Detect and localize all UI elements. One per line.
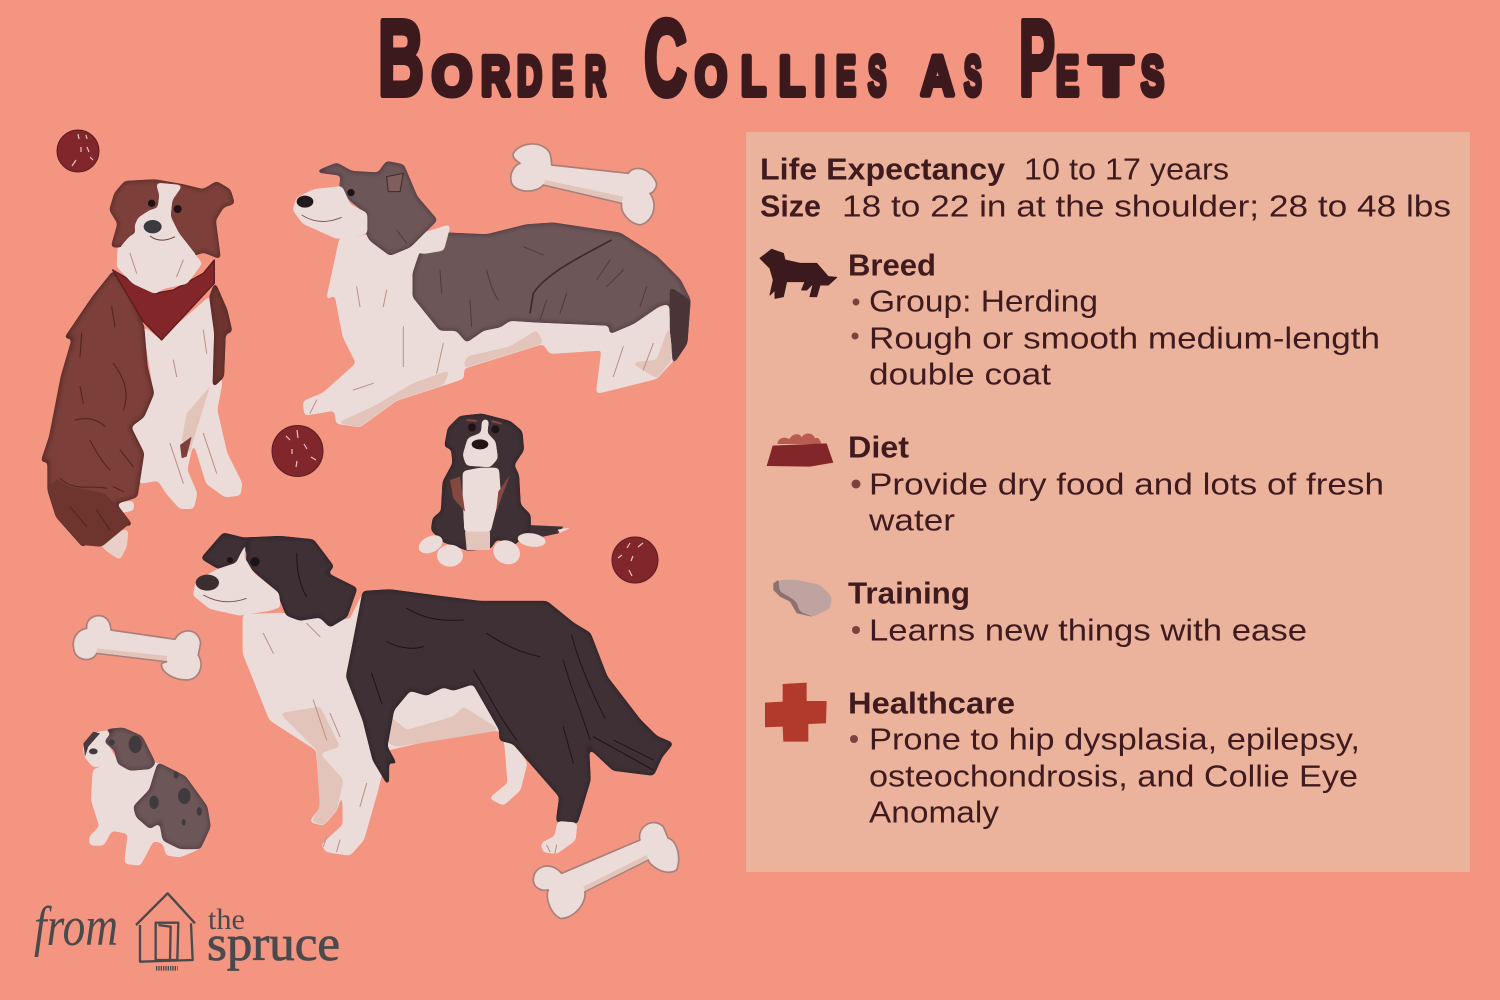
bone shading (544, 180, 623, 202)
paws (416, 531, 546, 569)
tail tip (92, 530, 128, 560)
bone shape (73, 616, 201, 680)
face details (196, 557, 260, 602)
right coat strip (210, 283, 232, 387)
grey body (134, 763, 210, 848)
title: A (921, 44, 954, 107)
section: diet (848, 430, 1384, 538)
title: I (815, 44, 825, 107)
bone: top right (511, 144, 657, 225)
bullet dot (852, 480, 860, 488)
panel background (746, 132, 1470, 872)
hind paw (113, 502, 133, 513)
icon: red cross (765, 683, 827, 742)
title: T (1090, 44, 1132, 107)
title: S (868, 44, 894, 107)
black head (202, 533, 357, 627)
bullet text continued: double coat (869, 358, 1052, 392)
title: R (481, 44, 510, 107)
title: L (779, 44, 805, 107)
food (777, 434, 821, 444)
heading: Diet (848, 430, 909, 464)
white coat base (303, 230, 673, 427)
muzzle (193, 538, 280, 615)
blaze and muzzle (120, 183, 197, 260)
bullet text: Provide dry food and lots of fresh (869, 468, 1384, 502)
heading: Breed (848, 248, 936, 282)
from script: from (34, 896, 118, 958)
grey head (102, 728, 155, 770)
bone: left (73, 616, 201, 680)
bullet text continued: water (868, 504, 955, 538)
white chest (463, 468, 500, 532)
ball: right (612, 537, 658, 583)
title: R (585, 44, 614, 107)
title: O (432, 44, 472, 107)
chest ruff (117, 237, 202, 293)
size: Size (760, 190, 821, 224)
fur strokes (60, 307, 133, 530)
icon: food bowl (767, 434, 833, 467)
spots and face (89, 736, 202, 826)
white face (83, 730, 118, 767)
heading: Healthcare (848, 686, 1015, 720)
bone shading (97, 648, 167, 661)
dog: grey lying collie (293, 162, 690, 427)
rear paw (542, 822, 577, 853)
bullet text: Prone to hip dysplasia, epilepsy, (869, 722, 1360, 756)
dog: black and white puppy (416, 414, 568, 569)
dog: large black and white standing collie (193, 533, 673, 855)
logo: from the spruce (34, 893, 340, 971)
title: D (517, 44, 542, 107)
bullet text continued: Anomaly (869, 796, 1000, 830)
grey head (317, 162, 437, 255)
tail shading (48, 478, 130, 547)
white coat (90, 760, 200, 865)
title: E (1056, 44, 1079, 107)
bullet text: Rough or smooth medium-length (869, 322, 1380, 356)
shaded belly and leg (337, 323, 672, 427)
thigh line (530, 240, 612, 313)
title: S (1141, 44, 1164, 107)
face details (297, 173, 403, 221)
bone: bottom right (533, 823, 679, 918)
life expectancy: 10 to 17 years (1024, 152, 1229, 186)
bowl (767, 443, 833, 467)
dark ear left (83, 732, 100, 757)
title: C (644, 0, 687, 118)
ball: top left (57, 130, 99, 172)
title: P (1019, 0, 1055, 118)
bullet text: Learns new things with ease (869, 614, 1307, 648)
title: L (741, 44, 766, 107)
bandana (113, 260, 214, 340)
shape (778, 580, 832, 617)
face details (467, 420, 502, 449)
dog: small merle puppy (83, 728, 210, 865)
heading: Training (848, 576, 970, 610)
ball: centre (272, 426, 323, 476)
fur strokes (297, 553, 653, 770)
bullet dots (852, 299, 860, 340)
fur strokes (397, 230, 647, 327)
title: E (552, 44, 573, 107)
tail (527, 525, 563, 537)
brown head and ears (110, 180, 234, 258)
bullet text continued: osteochondrosis, and Collie Eye (869, 760, 1358, 794)
tan patches (450, 475, 510, 512)
muzzle and blaze (463, 420, 497, 467)
size: 18 to 22 in at the shoulder; 28 to 48 lbs (842, 190, 1451, 224)
section: breed (848, 248, 1380, 392)
spruce: spruce (207, 915, 340, 971)
the: the (208, 903, 245, 936)
section: training (848, 576, 1307, 648)
grey coat (413, 223, 690, 363)
title: E (836, 44, 856, 107)
white coat base (243, 593, 527, 855)
black coat (347, 590, 673, 823)
title: O (695, 44, 727, 107)
bone shape (511, 144, 657, 225)
bullet text: Group: Herding (869, 284, 1098, 318)
title: S (964, 44, 989, 107)
house icon (136, 893, 195, 968)
white collar (410, 225, 450, 253)
life expectancy: Life Expectancy (760, 152, 1005, 186)
brown coat (42, 272, 153, 547)
panel: facts (746, 132, 1470, 872)
tail tip (558, 528, 568, 532)
dog: brown sitting collie with bandana (42, 180, 242, 560)
bone shading (583, 855, 648, 891)
muzzle (293, 187, 367, 238)
shadow (773, 580, 812, 617)
bone shape (533, 823, 679, 918)
white chest and legs (130, 297, 242, 508)
eyes, nose and mouth (144, 200, 182, 240)
shading (280, 707, 500, 825)
dark body and head (432, 414, 530, 550)
tail dark (670, 287, 690, 363)
bullet dot (852, 626, 860, 634)
icon: dog silhouette (760, 249, 837, 298)
section: healthcare (848, 686, 1360, 830)
icon: training (773, 580, 832, 617)
title: B (378, 0, 424, 118)
bullet dot (850, 735, 858, 743)
